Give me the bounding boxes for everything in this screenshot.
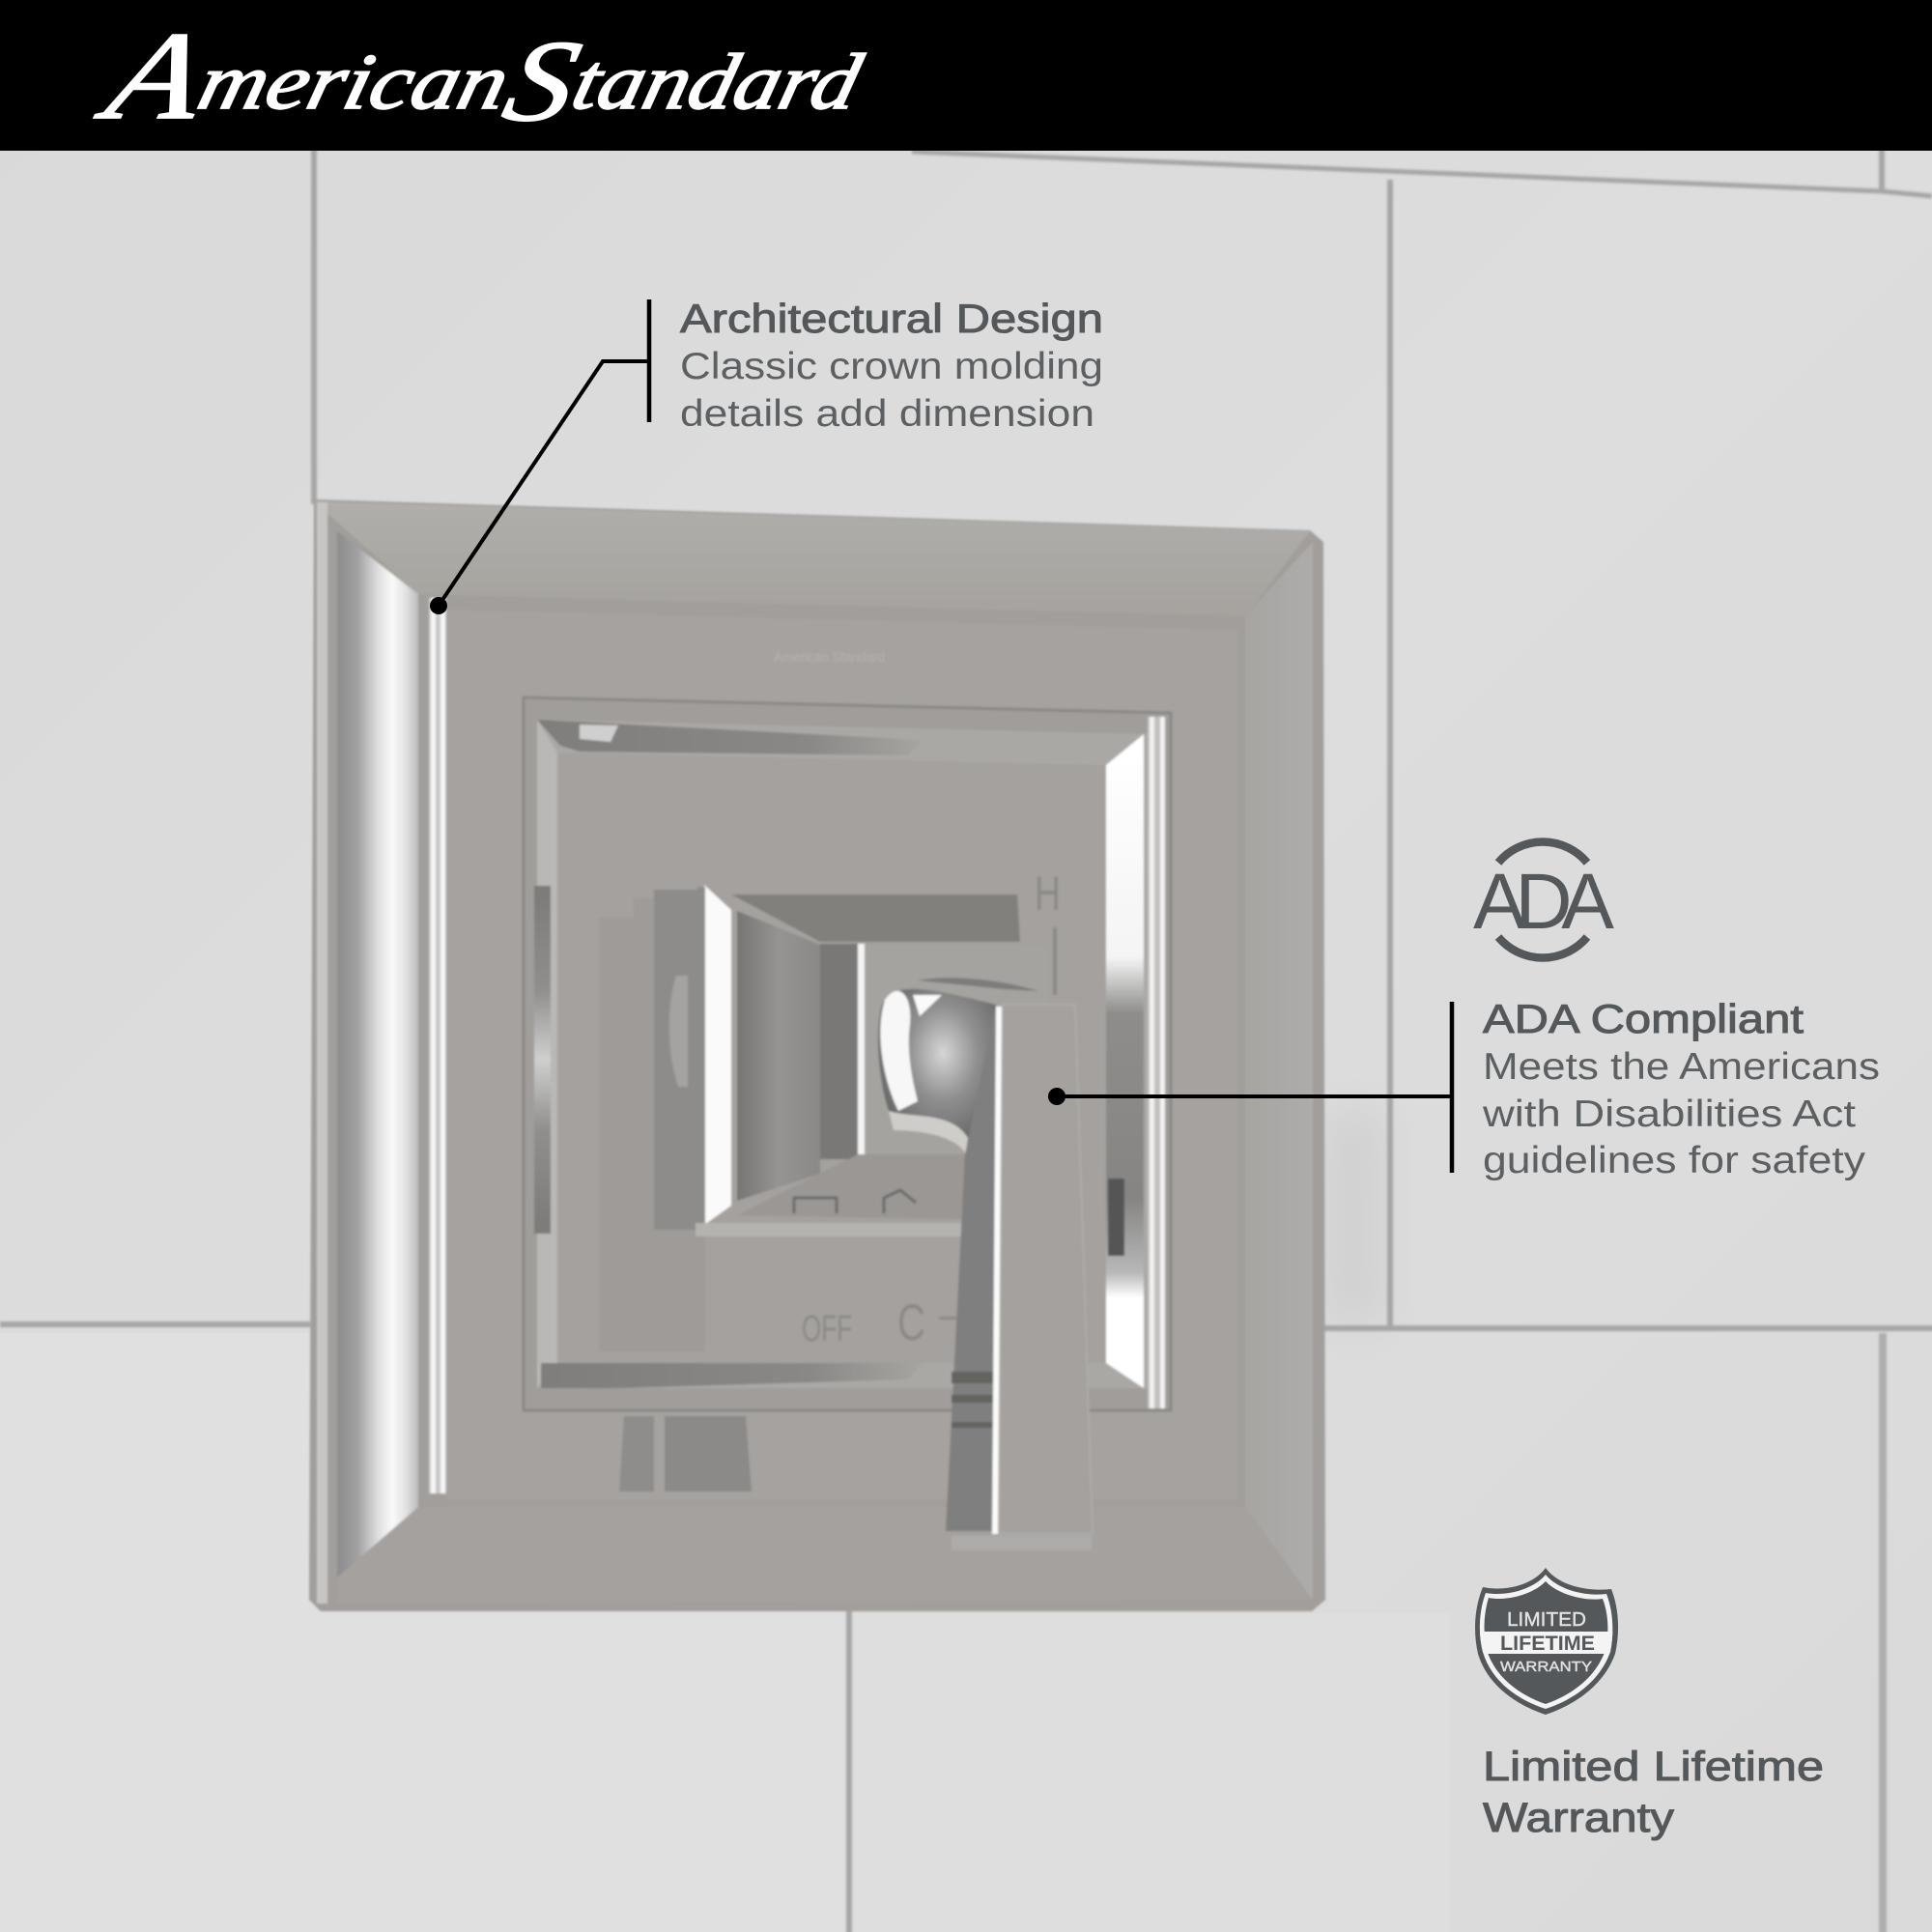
leader line bbox=[430, 299, 649, 614]
header bar bbox=[0, 0, 1932, 151]
icon: ADA badge: ADA bbox=[1473, 858, 1614, 946]
recess top reflection bbox=[537, 720, 923, 755]
body text bbox=[1482, 1046, 1880, 1181]
handle top wedge bbox=[731, 895, 1020, 942]
H mark: H bbox=[1035, 867, 1061, 921]
lever front face bbox=[999, 1005, 1093, 1534]
recess right chrome bevel bbox=[1106, 734, 1144, 1388]
handle dark strip bbox=[820, 944, 858, 1159]
icon: warranty shield bbox=[1475, 1568, 1620, 1715]
plate inner panel bbox=[447, 610, 1238, 1500]
brand logo: S bbox=[493, 17, 591, 146]
body text: details add dimension bbox=[680, 393, 1094, 435]
brand logo: tandard bbox=[564, 39, 869, 127]
lower plate reflections bbox=[619, 1416, 752, 1492]
handle reflection on face bbox=[599, 918, 634, 1351]
valve markings bbox=[802, 867, 1061, 1351]
plate left chrome bevel bbox=[337, 531, 418, 1577]
shower valve trim plate bbox=[309, 499, 1325, 1611]
handle base bottom ledge bbox=[696, 1223, 961, 1236]
handle base inner face bbox=[737, 911, 820, 1201]
recess left bevel bbox=[537, 720, 557, 1388]
icon: warranty shield: WARRANTY bbox=[1500, 1659, 1592, 1675]
handle inner square bbox=[865, 946, 1047, 1154]
C mark: C bbox=[897, 1294, 925, 1351]
right lower dark reflection bbox=[1108, 1179, 1124, 1256]
lever dark side bbox=[946, 1005, 996, 1531]
callout: ADA compliant bbox=[1048, 842, 1880, 1181]
handle base shiny edge bbox=[704, 885, 731, 1225]
icon: warranty shield: LIFETIME bbox=[1500, 1633, 1595, 1655]
recess left dark reflection bbox=[534, 886, 551, 1234]
plate bottom bevel bbox=[337, 1507, 1313, 1604]
small OFF/ON marks on wedge bbox=[794, 1190, 916, 1213]
handle base block dark side bbox=[654, 890, 699, 1230]
plate outer body bbox=[309, 499, 1325, 1611]
heading: Architectural Design bbox=[680, 296, 1103, 341]
brand logo: merican bbox=[190, 39, 518, 127]
tick mark bbox=[1053, 927, 1057, 995]
heading: ADA Compliant bbox=[1483, 996, 1804, 1041]
brand mark on plate: American Standard bbox=[774, 649, 885, 666]
handle under wedge bbox=[737, 1154, 966, 1219]
callout: limited lifetime warranty bbox=[1475, 1568, 1824, 1841]
C dash bbox=[939, 1317, 956, 1320]
recess frame bbox=[524, 697, 1171, 1410]
callout: architectural design bbox=[430, 296, 1103, 614]
icon: warranty shield: LIMITED bbox=[1507, 1609, 1586, 1631]
body text: Classic crown molding bbox=[680, 346, 1103, 387]
body text: Meets the Americans bbox=[1483, 1046, 1880, 1088]
handle chrome knob bbox=[878, 978, 1038, 1154]
plate bright inner strip bbox=[429, 598, 446, 1493]
body text: with Disabilities Act bbox=[1482, 1094, 1856, 1135]
brand logo: A bbox=[86, 6, 222, 146]
plate right bevel bbox=[1245, 542, 1313, 1600]
OFF mark: OFF bbox=[802, 1309, 852, 1350]
plate left edge highlights bbox=[317, 502, 327, 1604]
body text: guidelines for safety bbox=[1483, 1140, 1866, 1181]
brand logo bbox=[86, 6, 875, 146]
body text bbox=[680, 346, 1103, 435]
heading: Warranty bbox=[1483, 1795, 1675, 1841]
recess bottom reflection bbox=[541, 1363, 923, 1388]
heading bbox=[1483, 1744, 1824, 1841]
leader line bbox=[1048, 1002, 1452, 1173]
recess face bbox=[557, 753, 1106, 1363]
heading: Limited Lifetime bbox=[1483, 1744, 1824, 1790]
lever highlight bbox=[992, 1007, 1003, 1534]
recess bevel bbox=[537, 720, 1157, 1388]
plate top bevel bbox=[314, 501, 1310, 616]
